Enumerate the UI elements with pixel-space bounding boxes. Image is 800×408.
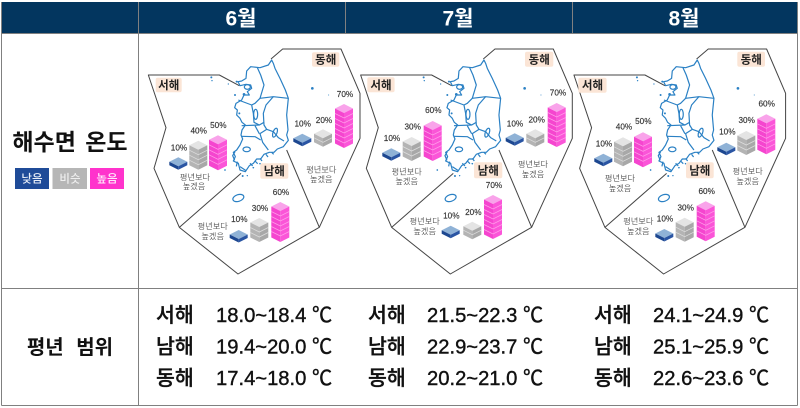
chart: South Sea August: 높겠음 — [627, 226, 650, 236]
header bar — [2, 2, 797, 33]
text block: August normal ranges: 남해 — [594, 336, 632, 358]
chart: South Sea July — [410, 181, 502, 239]
chart: East Sea June — [293, 90, 353, 184]
text block: July normal ranges: 20.2~21.0 ℃ — [427, 368, 543, 390]
chart: South Sea June: 10% — [231, 215, 247, 224]
text block: June normal ranges: 17.4~18.0 ℃ — [216, 368, 332, 390]
text block: June normal ranges: 서해 — [156, 304, 194, 327]
label: East Sea August — [737, 52, 765, 67]
chart: West Sea August — [594, 117, 652, 193]
chart: West Sea August: 10% — [596, 139, 612, 148]
chart: West Sea June: 10% — [171, 144, 187, 152]
chart: South Sea August: 10% — [657, 214, 673, 223]
chart: East Sea June: 높겠음 — [310, 174, 333, 184]
heading: June: 6월 — [226, 8, 256, 30]
text block: July normal ranges: 서해 — [368, 304, 406, 327]
chart: South Sea August: 30% — [678, 203, 694, 212]
map: June regions — [148, 49, 360, 274]
chart: West Sea July — [382, 106, 442, 186]
chart: East Sea August: 높겠음 — [736, 176, 759, 186]
text block: July normal ranges: 동해 — [368, 367, 406, 390]
chart: East Sea August: 60% — [759, 100, 775, 108]
label: South Sea July: 남해 — [478, 164, 499, 178]
chart: South Sea August: 60% — [699, 187, 715, 196]
row heading: sea surface temperature: 해수면 온도 — [12, 129, 128, 155]
chart: South Sea August — [623, 187, 715, 242]
panel: August map — [574, 49, 786, 274]
chart: West Sea July: 10% — [384, 134, 400, 143]
legend: low: 낮음 — [21, 172, 43, 186]
text block: July normal ranges — [368, 304, 543, 390]
chart: East Sea August: 10% — [719, 128, 735, 136]
map: August regions — [574, 49, 786, 274]
row heading: normal range: 평년 범위 — [27, 336, 113, 359]
heading: July: 7월 — [442, 8, 474, 30]
chart: West Sea June: 평년보다 — [180, 172, 211, 182]
chart: East Sea July: 10% — [507, 119, 523, 128]
text block: August normal ranges: 동해 — [594, 367, 632, 390]
chart: West Sea August: 50% — [635, 117, 651, 126]
chart: West Sea August: 평년보다 — [605, 173, 636, 183]
label: East Sea August: 동해 — [741, 54, 762, 66]
chart: East Sea June: 10% — [295, 120, 311, 128]
legend: similar: 비슷 — [59, 172, 81, 186]
label: West Sea July: 서해 — [370, 79, 392, 92]
chart: East Sea August: 평년보다 — [733, 166, 763, 176]
text block: August normal ranges: 22.6~23.6 ℃ — [653, 368, 769, 390]
chart: West Sea June: 40% — [191, 126, 207, 136]
chart: South Sea July: 평년보다 — [410, 216, 440, 226]
text block: July normal ranges: 22.9~23.7 ℃ — [427, 336, 543, 358]
text block: July normal ranges: 21.5~22.3 ℃ — [427, 305, 543, 327]
text block: June normal ranges: 남해 — [156, 336, 194, 358]
label: South Sea July — [474, 162, 502, 178]
chart: South Sea June — [198, 188, 289, 242]
chart: East Sea June: 70% — [337, 90, 353, 99]
chart: South Sea July: 20% — [465, 208, 481, 217]
label: East Sea June: 동해 — [315, 54, 336, 67]
chart: South Sea June: 평년보다 — [198, 221, 228, 231]
label: West Sea July — [367, 77, 395, 92]
text block: June normal ranges: 19.4~20.0 ℃ — [216, 336, 332, 358]
legend — [15, 168, 124, 189]
chart: East Sea July: 20% — [529, 115, 545, 124]
chart: West Sea July: 60% — [425, 106, 441, 115]
chart: West Sea July: 30% — [405, 122, 421, 132]
chart: West Sea June: 높겠음 — [183, 181, 206, 191]
chart: South Sea July: 70% — [486, 181, 502, 190]
panel: June map — [148, 49, 360, 274]
label: East Sea July — [525, 52, 553, 67]
chart: East Sea June: 20% — [316, 116, 332, 125]
text block: August normal ranges — [594, 304, 769, 390]
chart: South Sea June: 30% — [252, 204, 268, 213]
chart: West Sea July: 높겠음 — [395, 176, 418, 186]
chart: East Sea July: 70% — [550, 88, 566, 98]
label: South Sea August — [686, 162, 714, 178]
text block: June normal ranges — [156, 304, 332, 390]
chart: South Sea August: 평년보다 — [623, 216, 654, 226]
label: East Sea June — [312, 52, 339, 67]
text block: June normal ranges: 동해 — [156, 367, 194, 390]
legend: high: 높음 — [96, 172, 118, 186]
map: July regions — [361, 49, 572, 274]
chart: East Sea June: 평년보다 — [306, 164, 337, 174]
chart: West Sea August: 높겠음 — [609, 183, 632, 193]
label: East Sea July: 동해 — [529, 54, 550, 66]
chart: East Sea July — [506, 88, 566, 179]
text block: August normal ranges: 25.1~25.9 ℃ — [653, 336, 769, 358]
chart: South Sea July: 10% — [443, 212, 459, 220]
text block: July normal ranges: 남해 — [368, 336, 406, 358]
label: South Sea August: 남해 — [689, 164, 710, 178]
chart: South Sea June: 60% — [273, 188, 289, 197]
label: West Sea August — [578, 78, 607, 93]
chart: East Sea August: 30% — [739, 116, 755, 125]
text block: August normal ranges: 서해 — [594, 304, 632, 327]
chart: South Sea June: 높겠음 — [201, 231, 224, 241]
chart: West Sea June — [169, 121, 227, 191]
label: South Sea June — [260, 163, 288, 179]
chart: East Sea July: 평년보다 — [518, 159, 549, 169]
chart: West Sea June: 50% — [210, 121, 226, 130]
chart: South Sea July: 높겠음 — [413, 226, 436, 236]
label: West Sea June: 서해 — [158, 79, 179, 92]
text block: August normal ranges: 24.1~24.9 ℃ — [653, 305, 769, 327]
label: West Sea June — [156, 78, 182, 92]
panel: July map — [361, 49, 572, 274]
chart: West Sea July: 평년보다 — [392, 166, 422, 176]
label: South Sea June: 남해 — [264, 165, 285, 178]
chart: East Sea August — [717, 100, 775, 186]
heading: August: 8월 — [668, 8, 700, 30]
chart: West Sea August: 40% — [616, 122, 632, 132]
label: West Sea August: 서해 — [582, 79, 603, 92]
text block: June normal ranges: 18.0~18.4 ℃ — [216, 305, 332, 327]
chart: East Sea July: 높겠음 — [522, 169, 545, 179]
